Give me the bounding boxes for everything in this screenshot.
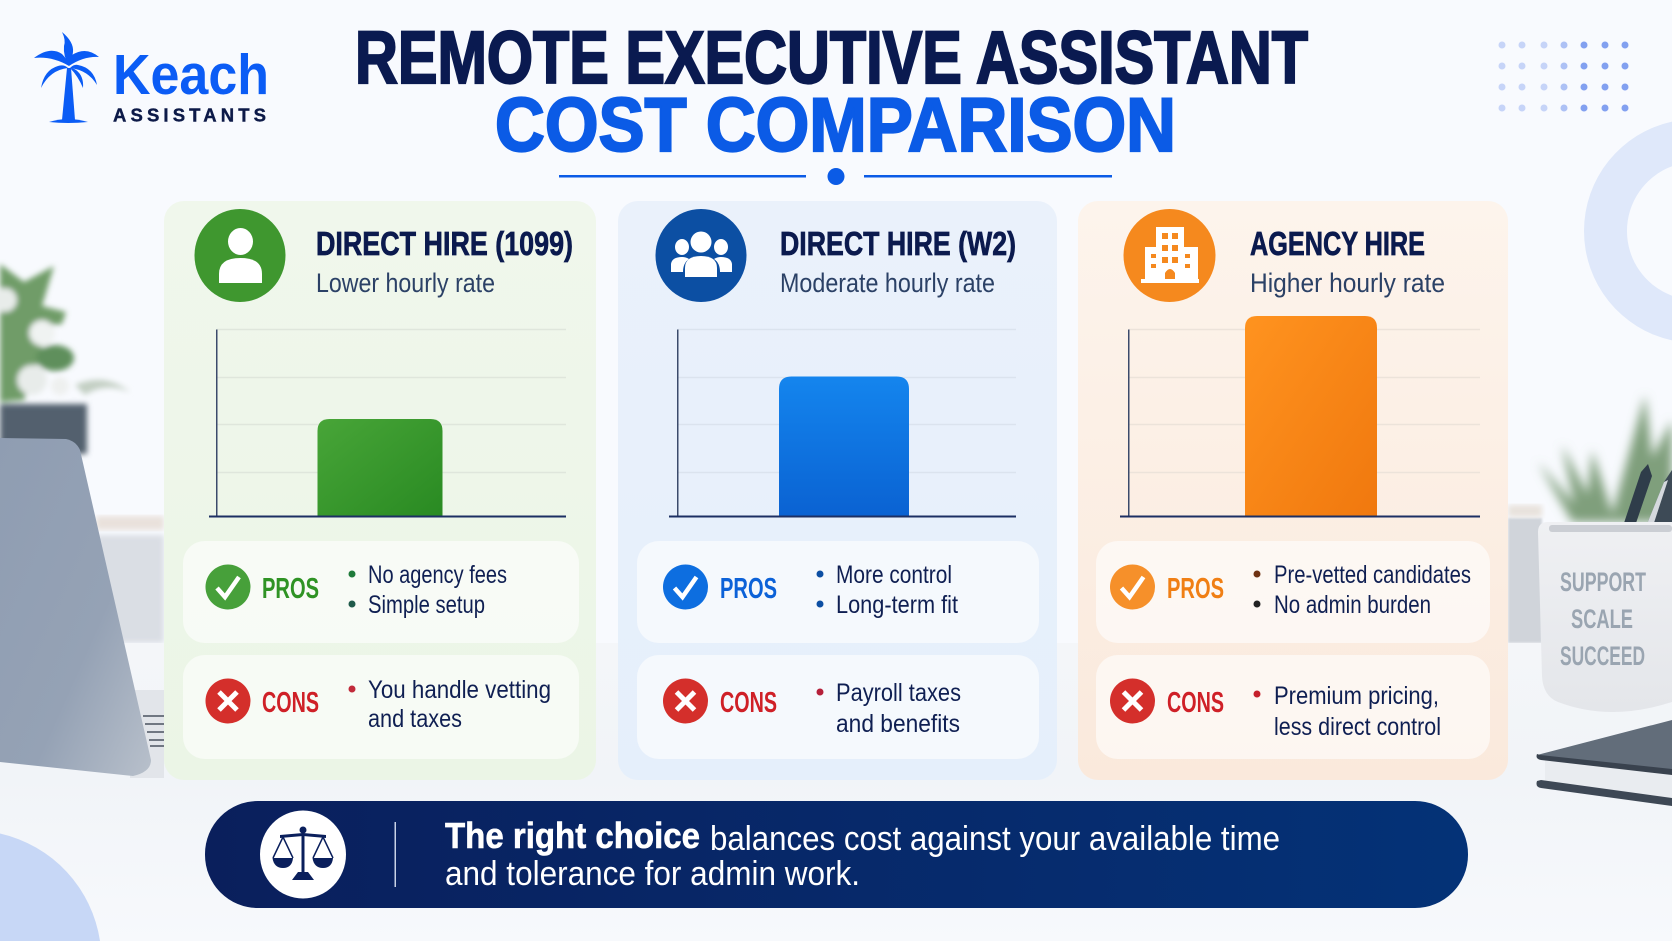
decoration: blurred plant left [0,264,130,454]
heading: AGENCY HIRE [1250,225,1425,262]
banner divider [394,822,396,887]
icon: palm tree [34,32,99,123]
banner text [445,815,1280,893]
cons list: and taxes [368,705,462,733]
pros label: PROS [262,573,319,605]
banner text: The right choice [445,815,700,856]
cons label: CONS [720,687,777,719]
icon: check [663,564,708,610]
icon: scales [260,810,346,898]
cons list: less direct control [1274,713,1441,741]
bar chart [669,330,1016,518]
cons list [816,679,961,738]
pros list: No admin burden [1274,591,1431,619]
title line 2: COST COMPARISON [495,83,1176,168]
pros list: Simple setup [368,591,485,619]
icon: building [1124,209,1216,302]
pros list: No agency fees [368,561,507,589]
cup text: SCALE [1571,604,1633,634]
decoration: blurred plant right [1538,395,1672,522]
pros list [816,561,958,619]
cons list: Premium pricing, [1274,682,1439,710]
title [355,16,1308,168]
cons list: You handle vetting [368,676,551,704]
heading: DIRECT HIRE (W2) [780,225,1016,262]
cup [1538,522,1672,712]
cons label: CONS [1167,687,1224,719]
logo subtext: ASSISTANTS [113,104,266,126]
panel: direct hire w2 [618,201,1057,780]
pros label: PROS [1167,573,1224,605]
notebook [1536,720,1672,806]
panel: agency hire [1078,201,1508,780]
decoration: corner circle [0,834,100,941]
desk cup with pens [1538,464,1672,712]
banner text: and tolerance for admin work. [445,855,860,893]
icon: cross [206,678,250,724]
bar chart [1120,316,1480,518]
pros list: Long-term fit [836,591,958,619]
title divider [559,168,1112,185]
subheading: Higher hourly rate [1250,268,1445,298]
pros box [183,541,579,643]
pros list: Pre-vetted candidates [1274,561,1471,589]
bar chart [209,330,566,518]
cons list: and benefits [836,710,960,738]
logo wordmark: Keach [113,43,269,107]
decoration: dot grid [1498,42,1628,112]
logo [34,32,269,126]
cup text [1560,567,1646,671]
heading: DIRECT HIRE (1099) [316,225,573,262]
cons box [637,655,1039,759]
icon: person [194,209,286,302]
cons box [1096,655,1490,759]
pros list: More control [836,561,952,589]
summary banner [205,801,1468,908]
banner text: balances cost against your available time [710,820,1280,858]
cons list: Payroll taxes [836,679,961,707]
pros list [348,561,507,619]
title line 1: REMOTE EXECUTIVE ASSISTANT [355,16,1308,99]
icon: group [656,209,746,302]
icon: check [206,564,250,610]
cons list [348,676,551,733]
pros label: PROS [720,573,777,605]
pros list [1254,561,1471,619]
pros box [1096,541,1490,643]
cons label: CONS [262,687,319,719]
pens [1622,464,1672,529]
panel: direct hire 1099 [164,201,596,780]
laptop [0,438,164,778]
cons box [183,655,579,759]
cons list [1254,682,1441,741]
decoration: ring top right [1584,122,1672,340]
icon: cross [663,678,708,724]
pros box [637,541,1039,643]
subheading: Lower hourly rate [316,268,495,298]
icon: cross [1110,678,1155,724]
subheading: Moderate hourly rate [780,268,995,298]
icon: check [1110,564,1155,610]
